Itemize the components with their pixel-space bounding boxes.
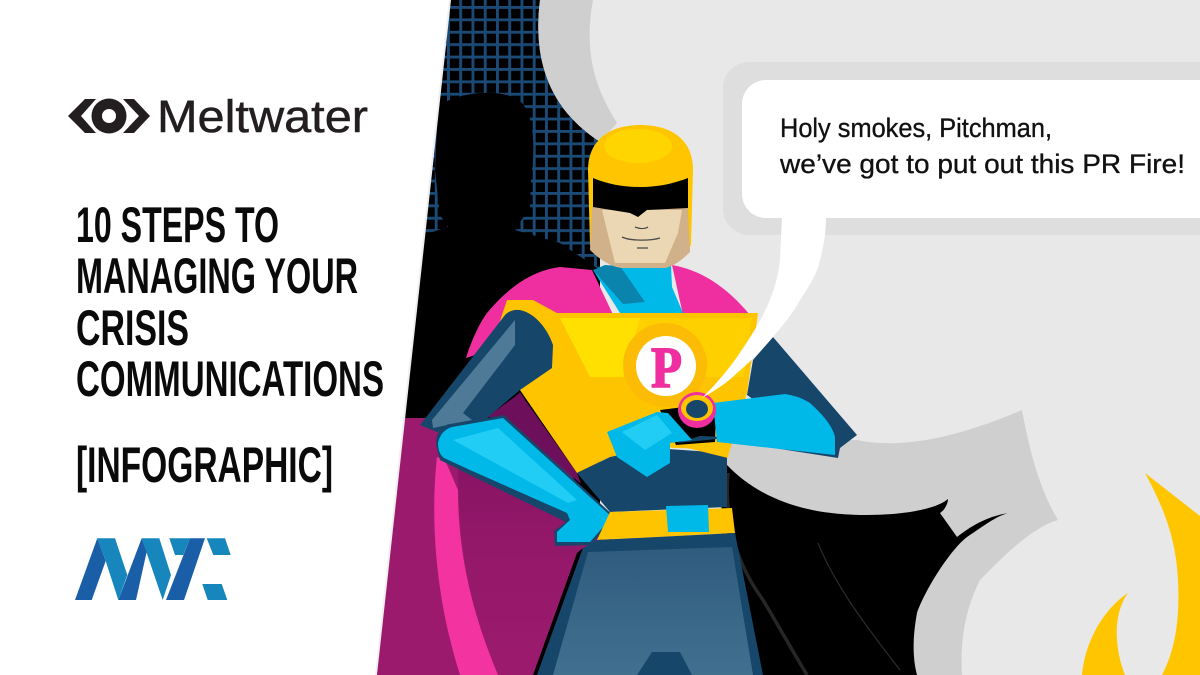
black gap behind watch [660, 405, 716, 445]
left upper arm [420, 310, 553, 432]
speech bubble [702, 62, 1200, 398]
Meltwater logo [68, 91, 368, 142]
smoke background [375, 0, 1200, 675]
smoke outline lower [720, 410, 1058, 675]
title: CRISIS [76, 300, 189, 356]
bubble text [779, 113, 1185, 179]
hero character [420, 125, 857, 675]
black cape right [720, 465, 1008, 675]
gold hem [675, 445, 730, 458]
logo wordmark: Meltwater [157, 91, 368, 142]
torso [497, 300, 758, 473]
smoke outline upper [538, 0, 617, 142]
MWC logo [75, 538, 231, 600]
bubble text: we’ve got to put out this PR Fire! [779, 149, 1185, 179]
neck [593, 265, 683, 313]
title: MANAGING YOUR [76, 248, 358, 304]
pants [533, 533, 763, 675]
watch [678, 392, 716, 428]
chest emblem [623, 323, 707, 407]
belt [597, 505, 735, 540]
chest emblem: P [651, 335, 682, 400]
hand [607, 412, 692, 477]
silhouette behind hero [400, 93, 600, 420]
right upper arm [747, 337, 857, 458]
cape pink stripe [434, 457, 498, 675]
cape magenta panel [377, 418, 600, 675]
flames [1082, 473, 1200, 675]
icon: eye [68, 98, 150, 134]
right forearm [677, 394, 838, 458]
bubble body [742, 80, 1200, 218]
cape dark fold [487, 393, 581, 484]
cape shadow [458, 392, 612, 675]
subtitle: [INFOGRAPHIC] [76, 437, 333, 493]
title: 10 STEPS TO [76, 197, 279, 253]
left forearm [436, 415, 615, 546]
abdomen [577, 448, 727, 512]
white left panel [0, 0, 451, 675]
bubble text: Holy smokes, Pitchman, [780, 113, 1052, 143]
shoulder cape [466, 267, 625, 358]
bubble tail [702, 216, 826, 398]
title [76, 197, 384, 407]
mask [593, 178, 688, 217]
helmet [588, 125, 693, 262]
face [590, 207, 690, 268]
bubble shadow [723, 62, 1200, 235]
night sky panel with halftone grid [375, 0, 600, 675]
title: COMMUNICATIONS [76, 351, 384, 407]
